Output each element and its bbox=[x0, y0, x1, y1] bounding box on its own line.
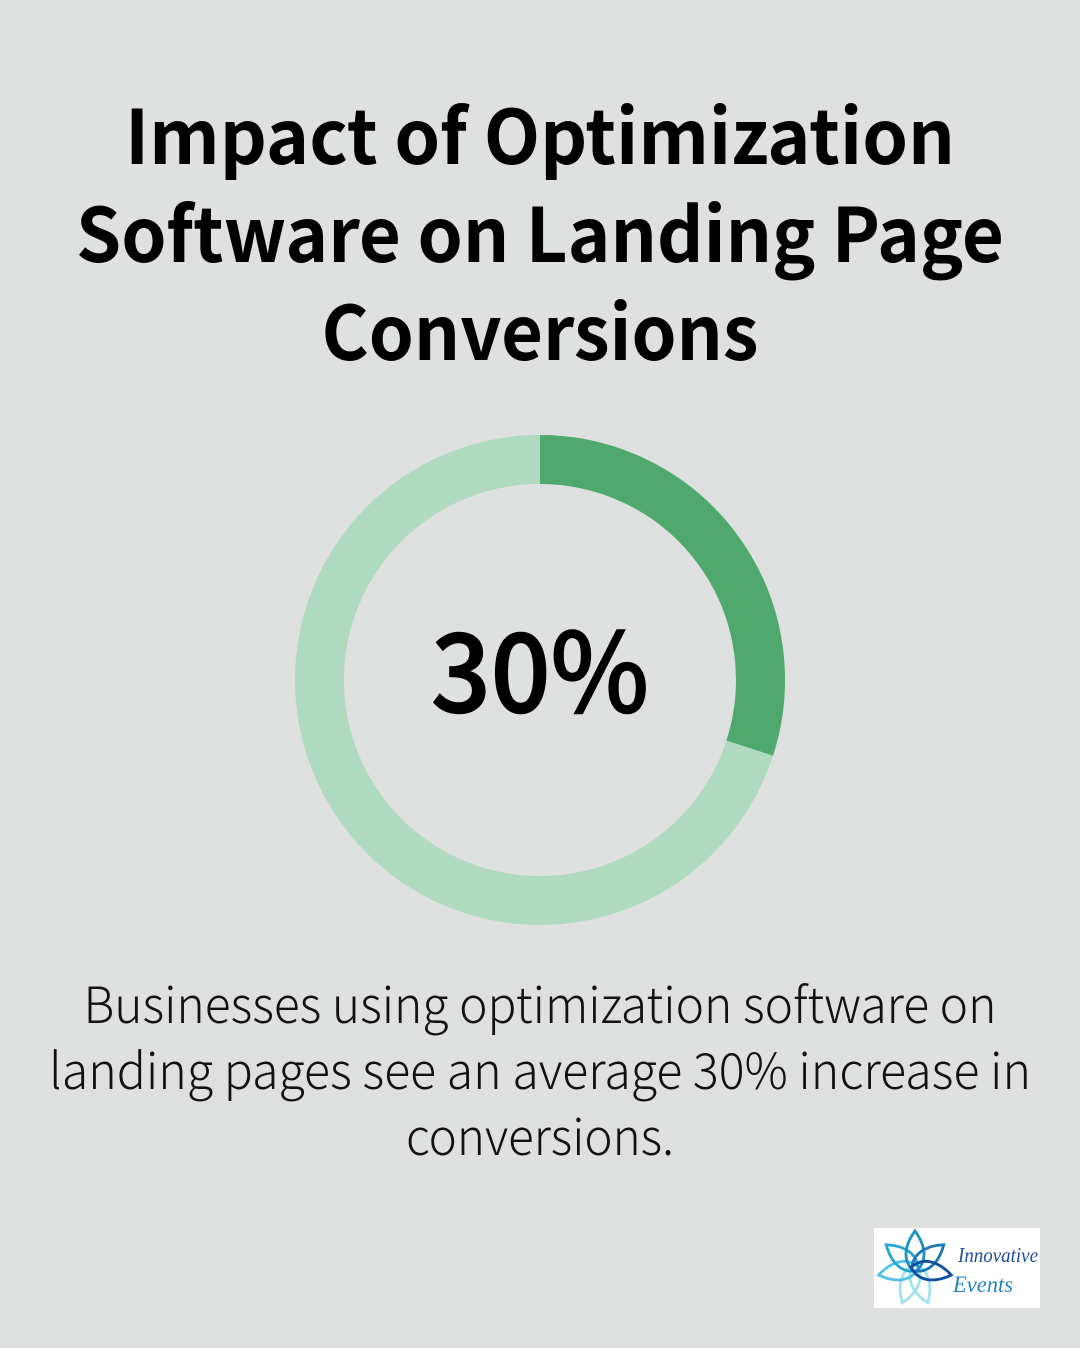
title: Conversions bbox=[322, 273, 758, 382]
logo: Innovative Events bbox=[874, 1228, 1040, 1308]
value: 30%: 30% bbox=[431, 587, 649, 744]
description text: landing pages see an average 30% increase in bbox=[49, 1032, 1031, 1104]
donut chart bbox=[320, 460, 760, 900]
logo wordmark: Innovative bbox=[957, 1243, 1038, 1267]
icon: flower bbox=[877, 1231, 953, 1306]
description text bbox=[49, 966, 1031, 1170]
logo wordmark bbox=[952, 1243, 1038, 1297]
title: Impact of Optimization bbox=[125, 77, 955, 186]
title bbox=[76, 77, 1004, 382]
description text: Businesses using optimization software on bbox=[84, 966, 996, 1038]
logo wordmark: Events bbox=[952, 1272, 1013, 1297]
description text: conversions. bbox=[406, 1098, 674, 1170]
title: Software on Landing Page bbox=[76, 175, 1004, 284]
